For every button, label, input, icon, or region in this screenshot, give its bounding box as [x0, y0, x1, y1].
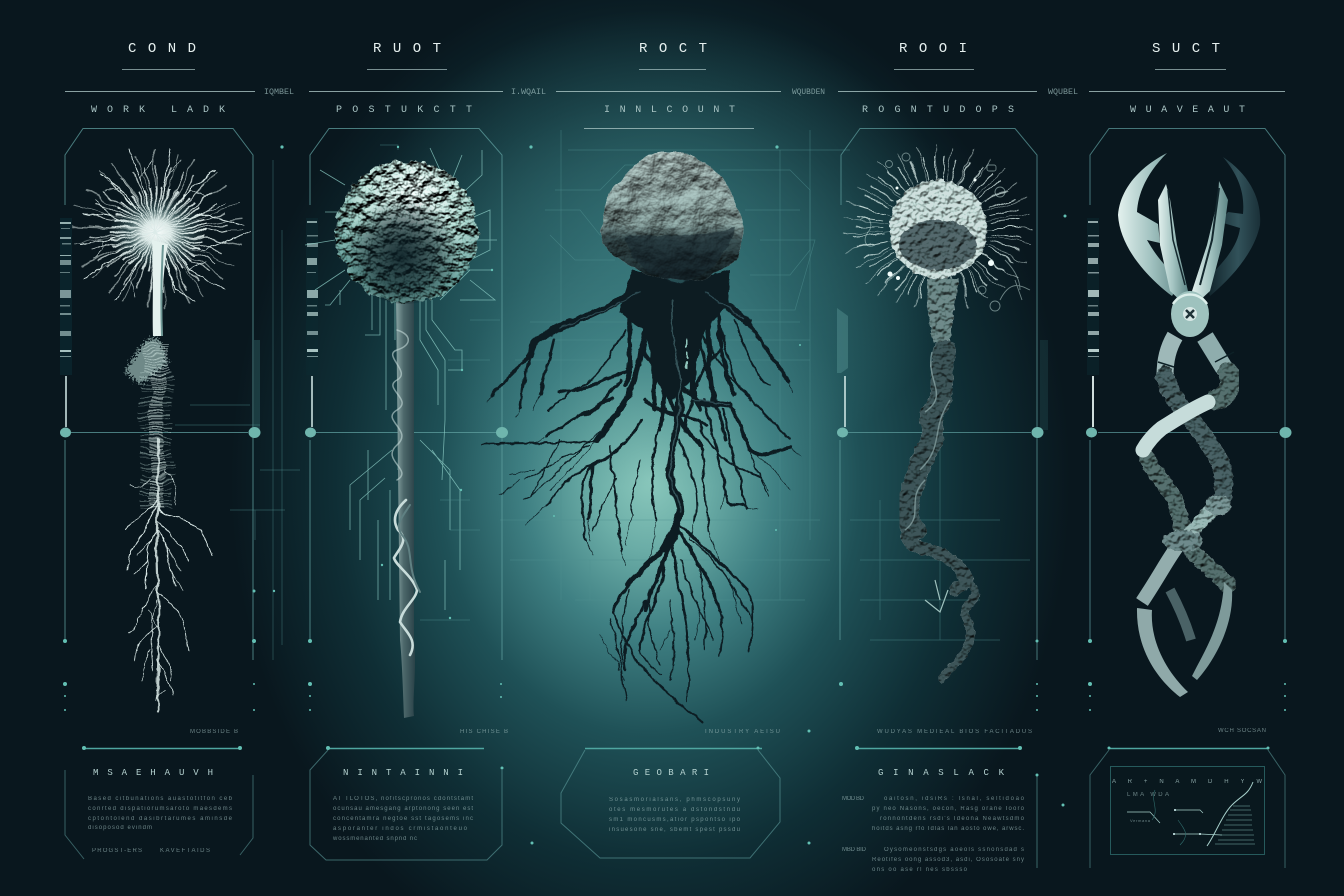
bottom caption row — [190, 728, 1266, 735]
panel frame 4 — [837, 128, 1044, 711]
bottom caption row: INDUSTRY AEISU — [705, 729, 780, 735]
text panel 3: Sosasmorialsans, phmscopsuny — [609, 797, 740, 803]
header: column 5: WUAVEAUT — [1130, 105, 1245, 116]
text panel 1 — [65, 746, 253, 859]
text panel 2: ocunsau amesgang arptonong seen est — [333, 806, 473, 812]
text panel 3 — [561, 730, 810, 858]
text panel 4: MOD BD — [842, 796, 865, 802]
text panel 3: otes mesmorutes a dstondstndu — [609, 807, 740, 813]
text panel 4: oaitosn, idsiRs : lsnal, seltidoao — [884, 796, 1025, 802]
text panel 2: concentamra negtoe sst tagosems inc — [333, 816, 473, 822]
bottom caption row: WUDYAS MEDIEAL BIOS FACITADUS — [877, 729, 1032, 735]
lower prongs — [1137, 608, 1188, 697]
header: column 2 — [309, 41, 546, 116]
text panel 4: ronnontdens rsdi's Ideona Neawtsdmo — [880, 816, 1025, 822]
data strip 2 — [306, 218, 318, 375]
illustration: central rock with dark roots — [483, 153, 800, 722]
text panel 2: wossmenanted snpnd nc — [332, 836, 417, 842]
text panel 4: ons oo ase rl nes sbssso — [872, 867, 968, 873]
text panel 1: disoposod evindm — [88, 825, 152, 831]
data strip 5 — [1087, 218, 1099, 375]
bottom caption row: MOBBSIDE B — [190, 729, 238, 735]
rock head — [600, 153, 743, 282]
header: column 5: SUCT — [1152, 41, 1220, 57]
panel frame 5 — [1086, 128, 1292, 711]
jointed arms — [1165, 336, 1175, 376]
text panel 5 with mini chart — [1062, 746, 1285, 868]
illustration: dandelion root — [80, 148, 250, 712]
mini chart: Vermana — [1130, 818, 1151, 823]
header: column 5 — [1089, 41, 1285, 116]
text panel 4: Reotifes oong assod3, asdi, Ososoate sny — [872, 857, 1024, 863]
text panel 2: NINTAINNI — [343, 768, 463, 778]
mini chart: A R + N A M D H Y W — [1112, 779, 1262, 785]
rock-bottom root mass — [618, 270, 730, 400]
illustration: circuit traces around sphere — [305, 145, 500, 620]
text panel 4: py neo Nasons, oecon, Rasg orane Iooro — [872, 806, 1025, 812]
illustration: glowing sphere on twisted stem — [860, 153, 1030, 678]
header: column 3: INNLCOUNT — [604, 105, 735, 116]
text panel 2 — [310, 746, 534, 860]
mini chart — [1110, 766, 1264, 854]
header: column 1: COND — [128, 41, 196, 57]
header: column 4: ROOI — [899, 41, 967, 57]
text panel 1: cptontolend dasibrtarumes aminsde — [88, 816, 233, 822]
header: column 3 — [556, 41, 825, 128]
text panel 1: MSAEHAUVH — [93, 768, 213, 778]
mini chart: LMA WDA — [1127, 792, 1169, 798]
header: column 1: WORK LADK — [91, 105, 225, 116]
text panel 1: KAVEFTAIDS — [160, 848, 210, 854]
header: column 1: IQMBEL — [264, 88, 294, 97]
data strip 1 — [60, 218, 72, 375]
text panel 4 — [842, 746, 1038, 873]
text panel 4: hoitds asng rfo Idlas lan aosto owe, arwsc. — [872, 826, 1024, 832]
header: column 3: ROCT — [639, 41, 707, 57]
panel frame 1 — [60, 128, 260, 711]
header: column 4 — [838, 41, 1078, 116]
text panel 1: Based citbunations auastotitfon ceb — [88, 796, 233, 802]
text panel 1: conrted dispatiorumsaroto maesdems — [88, 806, 232, 812]
text panel 4: GINASLACK — [878, 768, 1005, 778]
text panel 2: asporanter indos crmistaonteuo — [333, 826, 468, 832]
header: column 4: ROGNTUDOPS — [862, 105, 1014, 116]
pivot — [1171, 291, 1209, 337]
header: column 1 — [65, 41, 294, 116]
right antler — [1205, 157, 1260, 296]
background circuitry — [175, 130, 1066, 660]
header: column 2: POSTUKCTT — [336, 105, 472, 116]
header: column 4: WQUBEL — [1048, 88, 1078, 97]
illustration: plier root tool — [1118, 153, 1260, 697]
bottom caption row: WCH SOCSAN — [1218, 728, 1266, 734]
header: column 2: RUOT — [373, 41, 441, 57]
left antler — [1118, 153, 1182, 296]
text panel 3: insuesone sne, sbemt spest pssdu — [609, 827, 740, 833]
text panel 4: Oysomeonstsdgs aoeols ssnonsdad s — [884, 847, 1024, 853]
left jaw — [1158, 184, 1188, 302]
text panel 3: sm1 moncusms,atior pspontso ipo — [609, 817, 741, 823]
text panel 3: GEOBARI — [633, 768, 709, 778]
text panel 4: MBD BID — [842, 847, 867, 853]
bottom caption row: HIS CHISE B — [460, 729, 508, 735]
text panel 1: PROGST-ERS — [92, 848, 142, 854]
panel frame 2 — [305, 128, 508, 711]
header: column 2: I.WQAIL — [511, 88, 546, 97]
right jaw — [1192, 181, 1228, 302]
header: column 3: WQUBDEN — [792, 88, 825, 97]
illustration: leafy sphere on twisted stem — [336, 161, 478, 718]
text panel 2: AT TLOTOS, nofitscpronos cdontstamt — [333, 796, 473, 802]
